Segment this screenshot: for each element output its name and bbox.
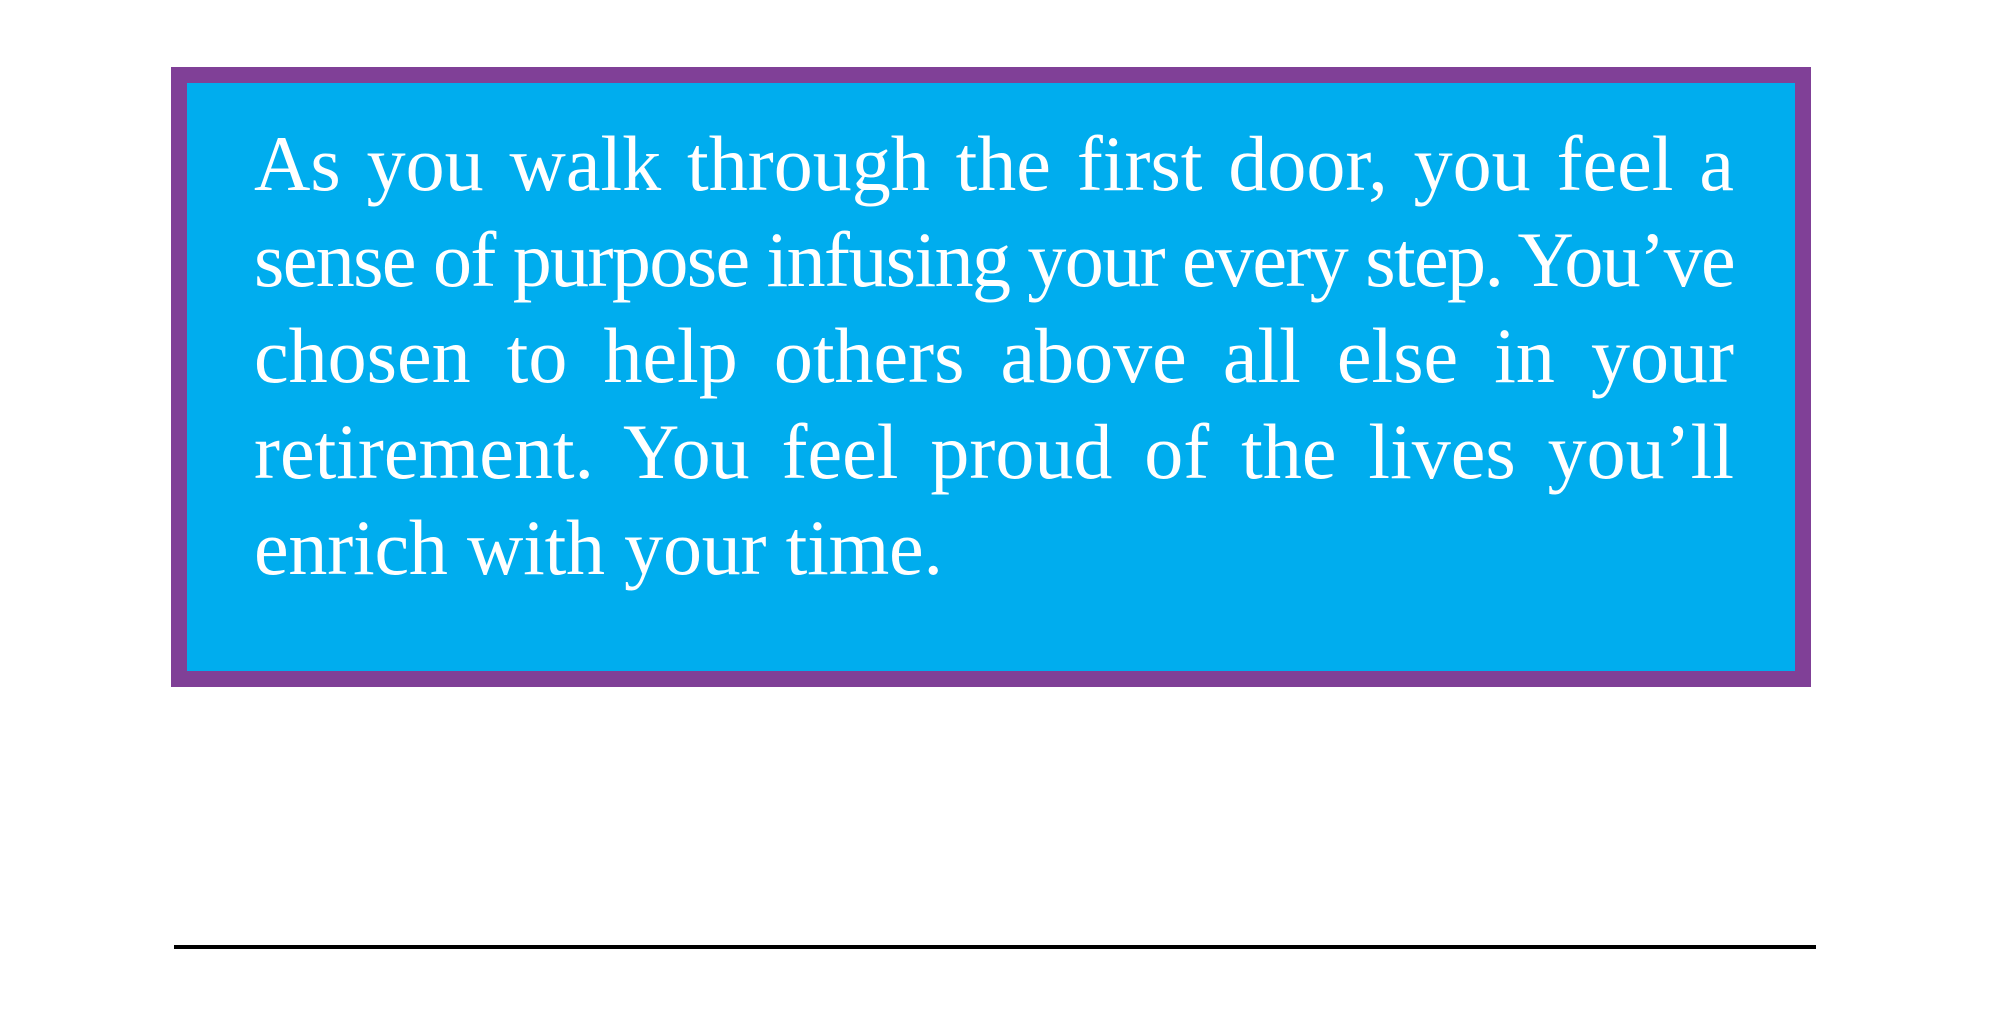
- panel: blue text box with purple border: [171, 67, 1811, 687]
- text block: first door passage: enrich with your time.: [254, 504, 943, 591]
- bottom rule: [174, 945, 1816, 949]
- text block: first door passage: retirement. You feel proud of the lives you’ll: [254, 408, 1734, 495]
- text block: first door passage: [254, 120, 1734, 591]
- text block: first door passage: As you walk through the first door, you feel a: [254, 120, 1734, 207]
- text block: first door passage: chosen to help others above all else in your: [254, 312, 1734, 399]
- text block: first door passage: sense of purpose infusing your every step. You’ve: [254, 216, 1734, 303]
